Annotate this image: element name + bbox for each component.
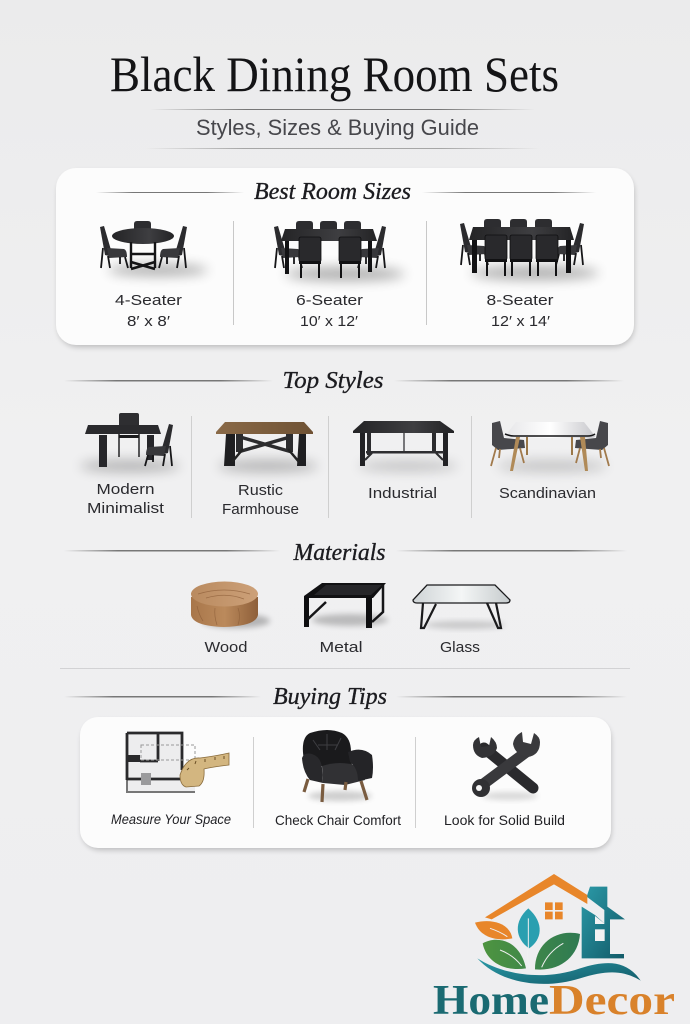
subtitle: Styles, Sizes & Buying Guide	[196, 115, 479, 140]
label: 8-seater: 8-Seater	[486, 292, 554, 309]
panel: buying tips card	[80, 717, 611, 850]
icon: 4-seater round table	[100, 221, 208, 276]
section: materials	[64, 540, 627, 656]
icon: rustic farmhouse table	[216, 422, 318, 472]
icon: scandinavian table	[491, 421, 609, 472]
label: modern minimalist line two: Minimalist	[87, 500, 165, 517]
label: rustic farmhouse: Rustic	[238, 482, 284, 499]
logo teal leaf	[518, 908, 540, 948]
logo green leaves	[483, 933, 580, 970]
logo window	[545, 902, 563, 919]
icon: industrial table	[353, 421, 458, 471]
icon: glass table	[413, 585, 510, 629]
section: buying tips	[64, 684, 627, 850]
icon: crossed wrenches	[472, 732, 540, 800]
icon: 6-seater table	[274, 221, 405, 281]
section: top styles	[64, 368, 624, 518]
heading: best room sizes: Best Room Sizes	[254, 179, 411, 205]
logo wordmark: Home: Home	[433, 978, 549, 1024]
logo wordmark: Decor: Decor	[549, 978, 675, 1024]
panel: best room sizes	[56, 168, 634, 347]
label: rustic farmhouse line two: Farmhouse	[222, 501, 299, 518]
label: modern minimalist: Modern	[96, 481, 154, 498]
label: metal: Metal	[320, 639, 362, 656]
icon: floor plan and tape measure	[126, 732, 229, 793]
icon: armchair	[302, 730, 373, 802]
label: measure your space: Measure Your Space	[111, 811, 231, 827]
icon: modern minimalist table	[80, 413, 180, 472]
label: 8-seater size: 12′ x 14′	[491, 313, 550, 330]
label: 6-seater size: 10′ x 12′	[300, 313, 358, 330]
icon: 8-seater table	[460, 219, 599, 280]
icon: wood block	[191, 582, 270, 628]
label: look for solid build: Look for Solid Build	[444, 812, 565, 828]
label: industrial: Industrial	[368, 485, 437, 502]
heading: materials: Materials	[293, 540, 386, 566]
heading: buying tips: Buying Tips	[273, 684, 387, 710]
label: scandinavian: Scandinavian	[499, 485, 596, 502]
label: 6-seater: 6-Seater	[296, 292, 363, 309]
logo: HomeDecor	[433, 874, 675, 1024]
label: glass: Glass	[440, 639, 480, 656]
label: wood: Wood	[204, 639, 248, 656]
logo orange leaf	[475, 921, 512, 939]
icon: metal table	[304, 583, 388, 628]
logo wave	[477, 958, 641, 984]
logo chimney and house wall	[582, 887, 625, 958]
logo roof	[485, 874, 587, 919]
label: check chair comfort: Check Chair Comfort	[275, 812, 401, 828]
title: Black Dining Room Sets	[110, 46, 559, 102]
label: 4-seater size: 8′ x 8′	[127, 313, 170, 330]
label: 4-seater: 4-Seater	[115, 292, 182, 309]
heading: top styles: Top Styles	[282, 368, 384, 394]
